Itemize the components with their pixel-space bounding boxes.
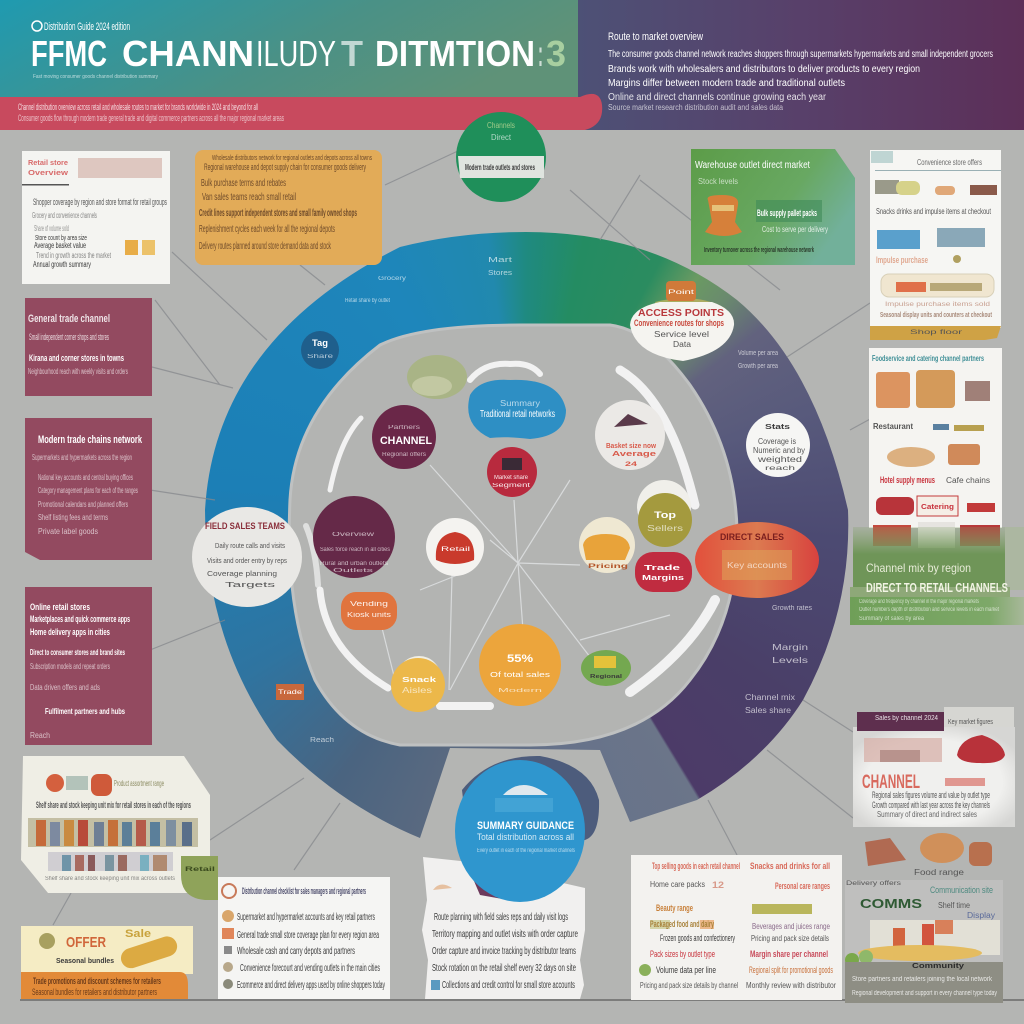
node: big red ellipse bbox=[695, 522, 819, 598]
node: white ring red center: Retail bbox=[441, 547, 470, 553]
node: big white circle left: Visits and order entry by reps bbox=[207, 558, 287, 565]
node: orange rounded bbox=[341, 592, 397, 630]
panel: product shelf card: Shelf share and stock keeping unit mix across outlets bbox=[45, 876, 175, 882]
panel: torn paper card bbox=[422, 857, 585, 999]
node: white flat top ellipse: Convenience routes for shops bbox=[634, 318, 724, 328]
panel: green card top right bbox=[691, 149, 855, 265]
node: white bowl circle bbox=[595, 400, 665, 470]
small orange ring tag: Trade bbox=[278, 690, 303, 696]
panel: orange card: Bulk purchase terms and rebates bbox=[201, 178, 286, 189]
node: white circle right: weighted bbox=[757, 455, 802, 464]
top green circle: Channels bbox=[487, 121, 515, 130]
background connector lines bbox=[53, 150, 905, 925]
panel: right column card 1: Impulse purchase items sold bbox=[885, 302, 990, 308]
node: yellow circle bbox=[391, 656, 445, 712]
panel: maroon card 2: Category management plans for each of the ranges bbox=[38, 486, 138, 495]
panel: green card top right: Inventory turnover across the regional warehouse network bbox=[704, 247, 814, 254]
node: green blob: Regional bbox=[590, 674, 623, 680]
panel: product list card: Home care packs bbox=[650, 880, 705, 889]
panel: maroon card 1 bbox=[25, 298, 152, 396]
hub spokes bbox=[380, 465, 670, 690]
panel: right column card 4: Shelf time bbox=[938, 901, 970, 910]
panel: product list card: Beauty range bbox=[656, 903, 693, 913]
header: purple summary panel bbox=[578, 0, 1024, 130]
header summary text bbox=[608, 31, 993, 112]
panel: maroon card 2 bbox=[25, 418, 152, 560]
panel: right column card 4: Display bbox=[967, 911, 995, 920]
panel: white list card: Wholesale cash and carry depots and partners bbox=[237, 946, 355, 957]
panel: right column card 4: Delivery offers bbox=[846, 881, 901, 887]
header: red subtitle band bbox=[0, 94, 602, 130]
node: blue blob: Summary bbox=[500, 399, 540, 408]
panel: maroon card 1: Kirana and corner stores in towns bbox=[29, 353, 124, 363]
node: big white circle left: Targets bbox=[225, 582, 276, 589]
panel: white card top left: Trend in growth across the market bbox=[36, 251, 111, 260]
panel: promo card: Trade promotions and discount schemes for retailers bbox=[33, 976, 161, 986]
node: red circle: Market share bbox=[494, 475, 529, 481]
panel: torn paper card: Collections and credit control for small store accounts bbox=[442, 980, 575, 991]
blue ring badge: Tag bbox=[312, 338, 328, 348]
bottom blue circle: SUMMARY GUIDANCE bbox=[477, 820, 574, 832]
panel: product list card: Pricing and pack size details bbox=[751, 934, 829, 943]
panel: right column card 1: Impulse purchase bbox=[876, 255, 928, 265]
panel: white card top left: Retail store bbox=[28, 160, 68, 167]
header: teal title panel bbox=[0, 0, 1024, 130]
panel: white list card: Ecommerce and direct delivery apps used by online shoppers today bbox=[237, 980, 385, 991]
panel: right column card 3: Summary of direct and indirect sales bbox=[877, 810, 977, 819]
panel: right column card 1: Shop floor bbox=[910, 330, 962, 336]
ring labels bbox=[310, 257, 812, 744]
node: white circle right: Numeric and by bbox=[753, 446, 805, 455]
node: green blob bbox=[581, 650, 631, 686]
header summary text: Brands work with wholesalers and distributors to deliver products to every region bbox=[608, 64, 920, 75]
ring labels: Stores bbox=[488, 270, 513, 277]
panel: right column card 1: Convenience store offers bbox=[917, 158, 982, 167]
ring labels: Sales share bbox=[745, 706, 792, 715]
panel: right column card 2: Catering bbox=[921, 504, 954, 511]
node: big red ellipse: Key accounts bbox=[727, 561, 787, 570]
panel: maroon card 3: Direct to consumer stores and brand sites bbox=[30, 648, 125, 657]
panel: torn paper card: Territory mapping and outlet visits with order capture bbox=[432, 929, 578, 940]
panel: maroon card 2: Supermarkets and hypermarkets across the region bbox=[32, 453, 132, 462]
panel: white card top left bbox=[22, 151, 170, 284]
node: red circle bbox=[487, 447, 537, 497]
panel: maroon card 3: Subscription models and repeat orders bbox=[30, 662, 110, 671]
panel: right column card 3: Sales by channel 2024 bbox=[875, 715, 938, 722]
header summary text: Source market research distribution audit and sales data bbox=[608, 103, 783, 112]
header: red subtitle band: Channel distribution overview across retail and wholesale routes to market for brands worldwide in 2024 and beyond for all bbox=[18, 102, 258, 112]
panel: torn paper card: Stock rotation on the retail shelf every 32 days on site bbox=[432, 963, 576, 974]
panel: maroon card 2: Private label goods bbox=[38, 527, 98, 536]
node: olive blob bbox=[407, 355, 467, 399]
panel: torn paper card: Order capture and invoice tracking by distributor teams bbox=[432, 946, 576, 957]
title: DITMTION bbox=[375, 33, 535, 74]
small orange ring tag bbox=[276, 684, 304, 700]
node: blue blob: Traditional retail networks bbox=[480, 409, 555, 420]
node: white flat top ellipse: Data bbox=[673, 340, 692, 349]
node: white circle right: Coverage is bbox=[758, 437, 796, 446]
panel: right column card 2 bbox=[869, 348, 1002, 548]
panel: right column card 2: Cafe chains bbox=[946, 476, 990, 485]
panel: right column card 2: Hotel supply menus bbox=[880, 475, 935, 485]
panel: maroon card 3: Reach bbox=[30, 731, 50, 740]
panel: right column card 1 bbox=[870, 150, 1001, 340]
ring labels: Growth rates bbox=[772, 605, 812, 612]
panel: white card top left: Overview bbox=[28, 170, 69, 177]
title bbox=[31, 33, 566, 74]
panel: green banner: Summary of sales by area bbox=[859, 616, 925, 622]
panel: product list card: Pricing and pack size details by channel bbox=[640, 981, 738, 990]
node: big maroon circle: Overview bbox=[332, 532, 375, 538]
panel: product shelf card bbox=[21, 756, 218, 900]
node: big orange circle: Of total sales bbox=[490, 672, 551, 679]
panel: product shelf card: Product assortment range bbox=[114, 779, 164, 788]
panel: maroon card 3: Fulfilment partners and hubs bbox=[45, 707, 125, 716]
node: white circle right: Stats bbox=[765, 424, 790, 431]
panel: maroon card 1: Small independent corner shops and stores bbox=[29, 332, 109, 342]
node: big white circle left: Coverage planning bbox=[207, 571, 277, 578]
node: white flat top ellipse: Service level bbox=[654, 330, 709, 339]
panel: maroon card 2: National key accounts and central buying offices bbox=[38, 473, 133, 482]
node: white flat top ellipse: Point bbox=[668, 290, 695, 296]
node: white flat top ellipse bbox=[630, 281, 734, 361]
ring labels: Grocery bbox=[378, 276, 406, 282]
node: big white circle left: FIELD SALES TEAMS bbox=[205, 521, 285, 531]
header summary text: Online and direct channels continue growing each year bbox=[608, 92, 827, 103]
node: yellow circle: Snack bbox=[402, 677, 436, 684]
panel: promo card: Sale bbox=[125, 928, 151, 940]
inner hub bbox=[289, 325, 737, 745]
node: big maroon circle: Outlets bbox=[333, 568, 374, 574]
panel: maroon card 3: Home delivery apps in cities bbox=[30, 627, 110, 637]
node: red circle: Segment bbox=[492, 483, 531, 489]
panel: green banner bbox=[850, 527, 1024, 625]
ring labels: Growth per area bbox=[738, 363, 778, 370]
panel: right column card 4: COMMS bbox=[860, 896, 922, 911]
panel: product list card: Snacks and drinks for all bbox=[750, 861, 830, 871]
panel: orange card: Van sales teams reach small retail bbox=[202, 192, 296, 203]
panel: maroon card 3 bbox=[25, 587, 152, 745]
panel: right column card 3 bbox=[853, 707, 1015, 827]
node: olive circle: Sellers bbox=[647, 524, 683, 533]
channel ring bbox=[205, 232, 848, 838]
panel: maroon card 2: Shelf listing fees and terms bbox=[38, 513, 108, 522]
panel: maroon card 2: Promotional calendars and planned offers bbox=[38, 500, 128, 509]
node: red rounded: Trade bbox=[644, 565, 680, 572]
title eyebrow bbox=[32, 21, 130, 33]
node: white bowl circle: 24 bbox=[625, 462, 638, 468]
ring labels: Reach bbox=[310, 737, 334, 744]
node: big white circle left bbox=[192, 507, 302, 607]
panel: promo card: Seasonal bundles for retailers and distributor partners bbox=[32, 987, 157, 997]
bottom blue circle: Total distribution across all bbox=[477, 832, 574, 842]
panel: orange card: Credit lines support independent stores and small family owned shops bbox=[199, 208, 357, 219]
panel: maroon card 3: Data driven offers and ads bbox=[30, 683, 100, 692]
hub white frame bbox=[306, 364, 715, 706]
node: white flat top ellipse: ACCESS POINTS bbox=[638, 308, 724, 319]
header: red subtitle band: Consumer goods flow through modern trade general trade and digital commerce partners across all the major regional market areas bbox=[18, 113, 284, 123]
panel: white list card bbox=[218, 877, 390, 999]
panel: product list card: Monthly review with distributor bbox=[746, 981, 836, 990]
node: orange rounded: Kiosk units bbox=[347, 612, 392, 619]
top green circle: Modern trade outlets and stores bbox=[465, 163, 535, 172]
panel: right column card 3: CHANNEL bbox=[862, 772, 920, 793]
title: 3 bbox=[546, 33, 566, 74]
node: big orange circle: Modern bbox=[498, 688, 543, 694]
panel: torn paper card: Route planning with field sales reps and daily visit logs bbox=[434, 912, 568, 923]
node: white bowl circle: Average bbox=[612, 451, 656, 458]
panel: promo card: OFFER bbox=[66, 934, 106, 951]
panel: white card top left: Shopper coverage by region and store format for retail groups bbox=[33, 197, 167, 207]
panel: maroon card 1: Neighbourhood reach with weekly visits and orders bbox=[28, 367, 128, 376]
node: orange rounded: Vending bbox=[350, 601, 388, 608]
node: maroon circle bbox=[372, 405, 436, 469]
panel: product list card: Top selling goods in each retail channel bbox=[652, 861, 740, 871]
node: big maroon circle: Sales force reach in all cities bbox=[320, 547, 390, 553]
panel: right column card 4: Store partners and retailers joining the local network bbox=[852, 976, 992, 983]
node: maroon circle: Partners bbox=[388, 425, 420, 431]
title: : bbox=[538, 33, 543, 74]
panel: right column card 4: Community bbox=[912, 963, 964, 970]
panel: product list card: Packaged food and dairy bbox=[650, 919, 714, 929]
node: red rounded bbox=[635, 552, 692, 592]
panel: right column card 3: Key market figures bbox=[948, 719, 993, 726]
header summary text: Margins differ between modern trade and traditional outlets bbox=[608, 78, 845, 89]
panel: product list card: 12 bbox=[712, 880, 724, 890]
node: olive circle: Top bbox=[654, 510, 677, 520]
panel: orange card: Wholesale distributors network for regional outlets and depots across all towns bbox=[212, 155, 372, 162]
panel: product list card: Regional split for promotional goods bbox=[749, 965, 833, 975]
node: white ring red center bbox=[426, 518, 484, 576]
panel: promo card: Seasonal bundles bbox=[56, 958, 114, 965]
blue ring badge: Share bbox=[307, 354, 334, 360]
top green circle bbox=[456, 112, 546, 202]
node: white circle right: reach bbox=[765, 466, 795, 472]
panel: orange card: Delivery routes planned around store demand data and stock bbox=[199, 241, 331, 252]
ring labels: Margin bbox=[772, 643, 808, 652]
panel: green card top right: Cost to serve per delivery bbox=[762, 225, 828, 234]
node: big orange circle: 55% bbox=[507, 653, 533, 665]
panel: right column card 4: Food range bbox=[914, 868, 965, 877]
panel: white list card: Convenience forecourt and vending outlets in the main cities bbox=[240, 963, 380, 974]
node: blue blob bbox=[468, 380, 566, 439]
ring labels: Levels bbox=[772, 656, 808, 665]
header summary text: Route to market overview bbox=[608, 31, 703, 43]
title: T bbox=[341, 33, 363, 74]
ring top right gold section bbox=[655, 298, 725, 322]
panel: product list card: Margin share per channel bbox=[750, 949, 828, 959]
panel: white list card: Supermarket and hypermarket accounts and key retail partners bbox=[237, 912, 375, 923]
ring labels: Volume per area bbox=[738, 350, 778, 357]
node: big maroon circle: Rural and urban outlets bbox=[320, 561, 388, 567]
panel: product list card: Frozen goods and confectionery bbox=[660, 933, 735, 943]
ring labels: Mart bbox=[488, 257, 512, 264]
node: olive circle bbox=[637, 480, 692, 547]
baseline rule bbox=[20, 999, 1024, 1001]
panel: maroon card 3: Online retail stores bbox=[30, 602, 90, 612]
ring labels: Channel mix bbox=[745, 693, 795, 702]
panel: white card top left: Average basket value bbox=[34, 241, 86, 250]
title caption: Fast moving consumer goods channel distribution summary bbox=[33, 74, 158, 80]
panel: orange card bbox=[195, 150, 382, 265]
panel: orange card: Replenishment cycles each week for all the regional depots bbox=[199, 224, 335, 235]
panel: right column card 4 bbox=[845, 833, 1003, 1003]
panel: promo card bbox=[21, 926, 193, 999]
panel: right column card 4: Communication site bbox=[930, 885, 993, 895]
panel: maroon card 1: General trade channel bbox=[28, 313, 110, 325]
title: CHANN bbox=[122, 33, 254, 74]
node: orange white circle bbox=[579, 517, 635, 573]
node: white circle right bbox=[746, 413, 810, 477]
panel: white card top left: Share of volume sold bbox=[34, 224, 69, 233]
node: big white circle left: Daily route calls and visits bbox=[215, 543, 285, 550]
panel: product list card: Volume data per line bbox=[656, 965, 716, 975]
title eyebrow: Distribution Guide 2024 edition bbox=[44, 21, 130, 33]
panel: product shelf card: Shelf share and stock keeping unit mix for retail stores in each of the regions bbox=[36, 800, 191, 810]
node: big maroon circle bbox=[313, 496, 395, 578]
node: big orange circle bbox=[479, 624, 561, 706]
green corner tag: Retail bbox=[185, 867, 216, 873]
ring labels: Retail share by outlet bbox=[345, 298, 390, 304]
panel: white card top left: Store count by area size bbox=[35, 235, 87, 242]
panel: orange card: Regional warehouse and depot supply chain for consumer goods delivery bbox=[204, 162, 366, 172]
node: maroon circle: CHANNEL bbox=[380, 435, 432, 447]
panel: product list card: Personal care ranges bbox=[775, 881, 830, 891]
panel: maroon card 2: Modern trade chains network bbox=[38, 434, 143, 446]
blue ring badge bbox=[301, 331, 339, 369]
panel: product list card: Pack sizes by outlet type bbox=[650, 949, 715, 959]
node: big red ellipse: DIRECT SALES bbox=[720, 532, 784, 542]
title: ILUDY bbox=[256, 33, 336, 74]
panel: green banner: Channel mix by region bbox=[866, 561, 971, 575]
bottom blue circle bbox=[455, 756, 599, 902]
green corner tag bbox=[181, 856, 218, 900]
panel: product list card bbox=[631, 855, 842, 1000]
top green circle: Direct bbox=[491, 133, 512, 142]
node: yellow circle: Aisles bbox=[402, 686, 432, 695]
panel: green card top right: Bulk supply pallet packs bbox=[757, 208, 817, 218]
panel: white card top left: Annual growth summary bbox=[33, 260, 91, 269]
node: orange white circle: Pricing bbox=[588, 564, 629, 570]
title: FFMC bbox=[31, 33, 107, 74]
panel: right column card 2: Restaurant bbox=[873, 422, 913, 431]
node: red rounded: Margins bbox=[642, 575, 684, 582]
panel: product list card: Beverages and juices range bbox=[752, 922, 830, 931]
panel: green card top right: Stock levels bbox=[698, 177, 738, 186]
panel: white card top left: Grocery and convenience channels bbox=[32, 211, 97, 220]
panel: white list card: General trade small store coverage plan for every region area bbox=[237, 930, 379, 941]
bottom blue circle: Every outlet in each of the regional market channels bbox=[477, 848, 575, 854]
node: white bowl circle: Basket size now bbox=[606, 443, 657, 450]
panel: maroon card 3: Marketplaces and quick commerce apps bbox=[30, 614, 130, 624]
node: maroon circle: Regional offers bbox=[382, 452, 426, 458]
text: Distribution channel checklist for sales managers and regional partners bbox=[242, 886, 366, 896]
panel: green card top right: Warehouse outlet direct market bbox=[695, 160, 810, 171]
